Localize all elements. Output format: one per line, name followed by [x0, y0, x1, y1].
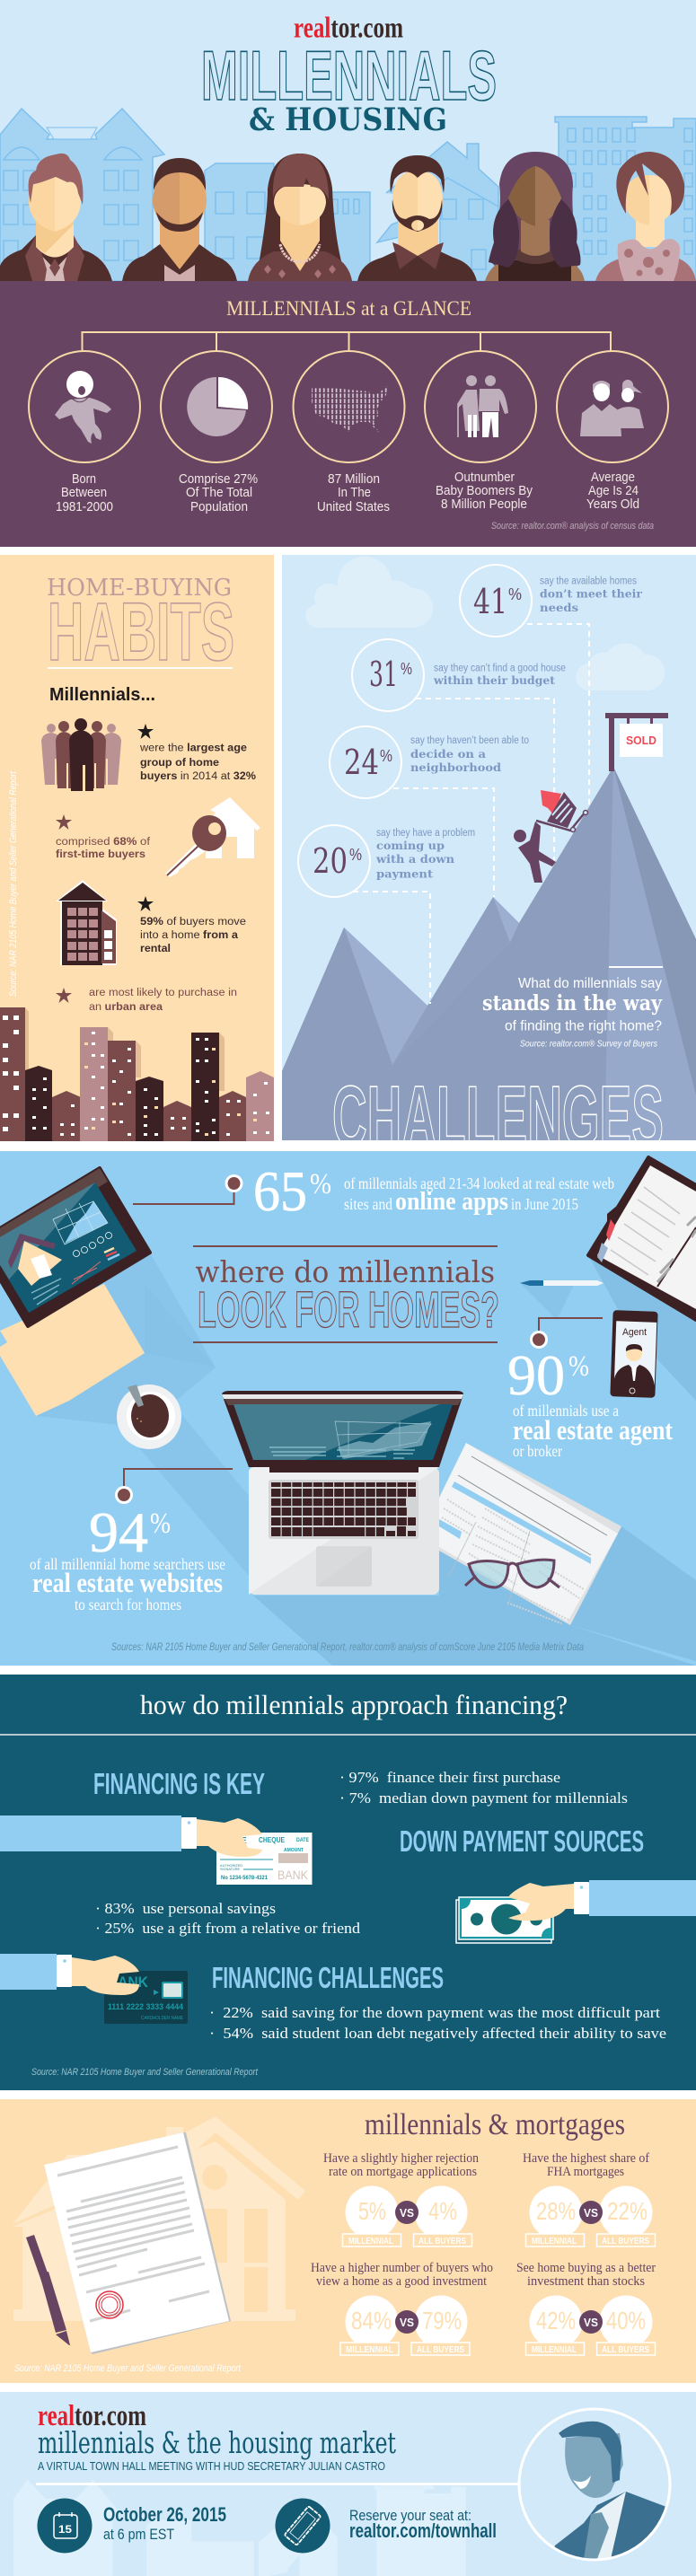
- comparison: FHA mortgages: MILLENNIAL: [532, 2237, 577, 2246]
- comparison: rejection rate: Have a slightly higher rejection: [323, 2151, 479, 2166]
- circle: pie chart: [161, 351, 272, 462]
- bullet 4: [56, 988, 237, 1013]
- event date: [103, 2503, 226, 2543]
- heading: MILLENNIALS at a GLANCE: [226, 297, 471, 320]
- panel: home-buying habits: [0, 555, 274, 1141]
- stat: 94 percent: of all millennial home searchers use: [30, 1555, 225, 1573]
- stat: 31 percent: %: [401, 660, 412, 678]
- illustration: hand with cheque: CHEQUE: [259, 1836, 286, 1844]
- source: Sources: NAR 2105 Home Buyer and Seller Generational Report, realtor.com® analysis of comScore June 2105 Media Metrix Data: [111, 1642, 584, 1653]
- title: and housing: & HOUSING: [249, 101, 447, 138]
- stat: 41 percent: needs: [540, 601, 578, 614]
- icon: newspaper: [439, 1443, 621, 1625]
- heading: millennials & mortgages: [365, 2108, 625, 2141]
- caption: born: Born: [72, 471, 96, 487]
- heading: where do millennials: [193, 1245, 499, 1343]
- subheading: financing is key: FINANCING IS KEY: [93, 1767, 265, 1800]
- stat: 31 percent: within their budget: [433, 673, 555, 687]
- list: financing challenges: · 22% said saving for the down payment was the most difficult part: [209, 2004, 660, 2021]
- comparison: FHA mortgages: FHA mortgages: [547, 2165, 624, 2179]
- icon: group of people: [41, 718, 121, 791]
- logo: realtor.com: [38, 2400, 146, 2432]
- illustration: hand with card: [0, 1954, 188, 2024]
- reserve seat: [349, 2507, 497, 2542]
- source: Source: NAR 2105 Home Buyer and Seller Generational Report: [14, 2363, 242, 2374]
- comparison: rejection rate: [323, 2151, 479, 2246]
- stat: 90 percent: %: [568, 1350, 589, 1383]
- sold sign: [605, 713, 668, 771]
- comparison: good investment: MILLENNIAL: [346, 2345, 393, 2355]
- comparison: better than stocks: investment than stocks: [527, 2274, 645, 2289]
- panel: header: [0, 0, 696, 281]
- illustration: hand with cheque: DATE: [296, 1838, 309, 1843]
- stat: 94 percent: real estate websites: [32, 1567, 223, 1598]
- icon: house and key: [165, 797, 260, 877]
- comparison: FHA mortgages: ALL BUYERS: [602, 2237, 649, 2246]
- illustration: hand with cheque: AUTHORIZED: [220, 1863, 242, 1868]
- sold sign: SOLD: [626, 734, 656, 747]
- comparison: better than stocks: 42%: [536, 2307, 576, 2334]
- icon: notebook: [588, 1157, 696, 1320]
- bullet 2: [56, 814, 151, 860]
- comparison: rejection rate: MILLENNIAL: [348, 2237, 393, 2246]
- panel: millennials at a glance: [0, 281, 696, 547]
- pointer: 90 percent: [530, 1318, 603, 1349]
- illustration: hand with cheque: E: [241, 1836, 247, 1846]
- person 2: [122, 158, 237, 281]
- panel: town hall: [0, 2392, 696, 2576]
- panel: where do millennials look for homes: [0, 1151, 696, 1666]
- icon: phone agent: [610, 1310, 658, 1398]
- bullet 3: rental: [140, 944, 171, 954]
- comparison: FHA mortgages: 28%: [536, 2197, 576, 2225]
- list: financing challenges: · 54% said student loan debt negatively affected their ability to save: [209, 2025, 666, 2042]
- comparison: good investment: Have a higher number of buyers who: [311, 2261, 493, 2275]
- bullet 3: 59% of buyers move: [140, 917, 237, 928]
- illustration: hand with cheque: No 1234-5678-4321: [221, 1876, 269, 1881]
- caption: 87 million: 87 Million: [328, 471, 380, 487]
- comparison: good investment: 84%: [351, 2307, 392, 2334]
- comparison: good investment: ALL BUYERS: [417, 2345, 464, 2355]
- person 4: [357, 155, 477, 281]
- ghost skyline: [13, 2480, 466, 2576]
- illustration: hand with card: ANK: [118, 1974, 149, 1991]
- comparison: good investment: [311, 2261, 493, 2355]
- bullet 1: buyers in 2014 at 32%: [140, 771, 254, 782]
- pointer: 94 percent: [115, 1469, 233, 1504]
- bullet 1: group of home: [140, 758, 219, 769]
- caption: 87 million: United States: [317, 499, 390, 514]
- panel: challenges: [282, 555, 696, 1165]
- heading: where do millennials: LOOK FOR HOMES?: [198, 1281, 499, 1339]
- stat: 90 percent: of millennials use a: [513, 1402, 619, 1420]
- comparison: rejection rate: VS: [400, 2206, 414, 2220]
- reserve seat: Reserve your seat at:: [349, 2507, 471, 2524]
- stat: 20 percent: %: [349, 846, 362, 864]
- icon: calendar: [38, 2498, 92, 2554]
- stat: 90 percent: 90: [507, 1343, 565, 1407]
- heading: where do millennials: where do millennials: [196, 1254, 495, 1289]
- stat: 65 percent: of millennials aged 21-34 looked at real estate web: [344, 1174, 614, 1192]
- stat: 41 percent: say the available homes: [540, 576, 637, 587]
- source: vertical: Source: NAR 2105 Home Buyer and Seller Generational Report: [8, 770, 19, 997]
- stat: 65 percent: %: [310, 1168, 331, 1200]
- challenges question: Source: realtor.com® Survey of Buyers: [520, 1040, 657, 1049]
- circle: US map: [293, 351, 404, 462]
- comparison: better than stocks: VS: [584, 2316, 598, 2329]
- stat: 94 percent: to search for homes: [75, 1596, 181, 1613]
- subheading: financing challenges: FINANCING CHALLENGES: [212, 1961, 444, 1994]
- list: financing is key: · 7% median down payment for millennials: [339, 1789, 628, 1807]
- stat: 90 percent: or broker: [513, 1442, 562, 1460]
- icon: phone agent: Agent: [622, 1327, 647, 1338]
- caption: age: Years Old: [586, 497, 639, 512]
- stat: 65 percent: in June 2015: [511, 1195, 578, 1213]
- caption: outnumber: Baby Boomers By: [436, 483, 533, 498]
- comparison: rejection rate: 4%: [428, 2197, 457, 2225]
- circle: average age: [557, 351, 668, 462]
- comparison: better than stocks: [516, 2261, 656, 2355]
- reserve seat: realtor.com/townhall: [349, 2519, 497, 2542]
- challenges question: [482, 966, 663, 1049]
- bullet 3: [137, 896, 246, 954]
- stat: 41 percent: %: [508, 585, 522, 603]
- circle: boomers: [425, 351, 536, 462]
- person 5: [485, 152, 585, 281]
- stat: 20 percent: coming up: [376, 839, 445, 852]
- comparison: FHA mortgages: [523, 2151, 656, 2246]
- connector bracket: [83, 332, 611, 351]
- icon: fountain pen: [26, 2235, 70, 2345]
- stat: 65 percent: online apps: [395, 1187, 508, 1216]
- illustration: hand with cheque: BANK: [278, 1868, 309, 1882]
- bullet 2: first-time buyers: [56, 849, 145, 860]
- source: Source: NAR 2105 Home Buyer and Seller Generational Report: [31, 2067, 259, 2078]
- caption: born: Between: [61, 485, 107, 500]
- event date: October 26, 2015: [103, 2503, 226, 2526]
- list: down payment sources: · 25% use a gift from a relative or friend: [95, 1920, 361, 1937]
- icon: document: [44, 2132, 231, 2354]
- city skyline: [0, 1007, 274, 1141]
- heading: millennials & the housing market: [38, 2425, 396, 2460]
- icon: laptop: [222, 1391, 463, 1595]
- subheading: A VIRTUAL TOWN HALL MEETING WITH HUD SECRETARY JULIAN CASTRO: [38, 2459, 385, 2473]
- logo: realtor.com: [294, 13, 403, 45]
- heading: how do millennials approach financing?: [140, 1689, 568, 1720]
- dashed connector lines: [353, 624, 589, 1004]
- pointer: 65 percent: [133, 1174, 242, 1204]
- caption: age: Age Is 24: [588, 483, 639, 498]
- bullet 4: an urban area: [89, 1002, 157, 1013]
- caption: population: Comprise 27%: [179, 471, 258, 487]
- climber with cart: [514, 790, 587, 883]
- stat: 20 percent: say they have a problem: [376, 828, 475, 839]
- stat: 20 percent: with a down: [375, 852, 454, 866]
- person 6: [595, 152, 696, 281]
- stat: 24 percent: say they haven’t been able to: [410, 735, 529, 746]
- stat: 94 percent: %: [150, 1508, 171, 1540]
- list: financing is key: [339, 1769, 628, 1807]
- stat: 31 percent: 31: [369, 655, 398, 694]
- clouds: [305, 557, 665, 690]
- icon: ticket: [275, 2498, 330, 2554]
- comparison: good investment: view a home as a good investment: [316, 2274, 488, 2289]
- illustration: hand with cheque: SIGNATURE: [220, 1867, 240, 1871]
- comparison: FHA mortgages: 22%: [607, 2197, 648, 2225]
- caption: outnumber: Outnumber: [454, 470, 515, 485]
- long shadows: [36, 1168, 696, 1666]
- stat: 65 percent: 65: [253, 1159, 307, 1223]
- stat: 20 percent: 20: [313, 841, 348, 881]
- stat: 20 percent: [298, 825, 475, 897]
- stat: 24 percent: 24: [344, 743, 379, 782]
- bullet 4: are most likely to purchase in: [89, 988, 237, 998]
- comparison: rejection rate: rate on mortgage applications: [329, 2165, 477, 2179]
- subheading: millennials: Millennials...: [49, 685, 155, 705]
- comparison: rejection rate: 5%: [358, 2197, 386, 2225]
- bullet 1: were the largest age: [140, 743, 242, 754]
- icon: apartment building: [56, 880, 117, 965]
- caption: 87 million: In The: [338, 485, 371, 500]
- background buildings: [0, 109, 696, 281]
- heading: habits: HABITS: [48, 586, 234, 678]
- caption: age: Average: [591, 470, 635, 485]
- icon: coffee: [117, 1385, 181, 1449]
- stat: 20 percent: payment: [376, 867, 433, 880]
- comparison: rejection rate: ALL BUYERS: [418, 2237, 466, 2246]
- stat: 24 percent: %: [380, 747, 392, 765]
- stat: 41 percent: 41: [473, 582, 507, 621]
- mountains: [282, 767, 696, 1140]
- heading: home-buying: HOME-BUYING: [47, 575, 232, 602]
- person 3: [248, 154, 352, 281]
- stat: 31 percent: say they can’t find a good house: [434, 663, 566, 673]
- caption: outnumber: 8 Million People: [441, 497, 527, 512]
- comparison: good investment: VS: [400, 2316, 414, 2329]
- stat: 94 percent: 94: [89, 1500, 148, 1564]
- illustration: hand with card: 1111 2222 3333 4444: [108, 2002, 184, 2012]
- bullet 3: into a home from a: [140, 930, 234, 941]
- stat: 24 percent: neighborhood: [410, 760, 501, 774]
- portrait: [518, 2408, 674, 2568]
- stat: 31 percent: [352, 639, 566, 711]
- source: Source: realtor.com® analysis of census data: [491, 521, 654, 532]
- caption: population: Of The Total: [186, 485, 252, 500]
- panel: millennials and mortgages: [0, 2099, 696, 2383]
- stat: 65 percent: [253, 1159, 614, 1223]
- challenges question: of finding the right home?: [505, 1018, 662, 1034]
- caption: population: Population: [190, 499, 248, 514]
- list: down payment sources: [95, 1900, 361, 1937]
- comparison: better than stocks: 40%: [606, 2307, 646, 2334]
- stat: 94 percent: [30, 1500, 225, 1613]
- caption: born: 1981-2000: [56, 499, 113, 514]
- icon: tablet: [0, 1168, 150, 1326]
- list: financing is key: · 97% finance their first purchase: [339, 1769, 560, 1786]
- challenges question: stands in the way: [482, 991, 663, 1015]
- illustration: hand with cheque: [0, 1816, 313, 1885]
- icon: folder: [0, 1284, 145, 1416]
- circle: born: [29, 351, 140, 462]
- icon: pen: [520, 1280, 603, 1286]
- stat: 90 percent: [507, 1343, 674, 1460]
- stat: 65 percent: sites and: [344, 1195, 392, 1213]
- comparison: FHA mortgages: VS: [584, 2206, 598, 2220]
- illustration: hand with card: CARDHOLDER NAME: [141, 2016, 183, 2021]
- ghost house: [13, 2116, 305, 2321]
- list: financing challenges: [209, 2004, 666, 2042]
- comparison: better than stocks: MILLENNIAL: [532, 2345, 577, 2355]
- stat: 41 percent: [460, 565, 642, 637]
- title: millennials: MILLENNIALS: [201, 36, 497, 115]
- person 1: [0, 154, 112, 281]
- comparison: good investment: 79%: [422, 2307, 462, 2334]
- illustration: hand with cheque: AMOUNT: [284, 1848, 304, 1853]
- challenges question: What do millennials say: [518, 976, 662, 991]
- comparison: better than stocks: ALL BUYERS: [602, 2345, 649, 2355]
- stat: 24 percent: decide on a: [410, 747, 486, 760]
- panel: financing: [0, 1675, 696, 2090]
- icon: glasses: [465, 1560, 559, 1587]
- list: down payment sources: · 83% use personal savings: [95, 1900, 276, 1917]
- comparison: better than stocks: See home buying as a better: [516, 2261, 656, 2275]
- bullet 2: comprised 68% of: [56, 837, 148, 848]
- icon: calendar: 15: [58, 2523, 72, 2536]
- stat: 41 percent: don’t meet their: [540, 587, 642, 600]
- stat: 24 percent: [330, 726, 529, 798]
- event date: at 6 pm EST: [103, 2526, 174, 2543]
- comparison: FHA mortgages: Have the highest share of: [523, 2151, 649, 2166]
- bullet 1: [137, 724, 256, 782]
- illustration: hand with cash: [456, 1880, 696, 1943]
